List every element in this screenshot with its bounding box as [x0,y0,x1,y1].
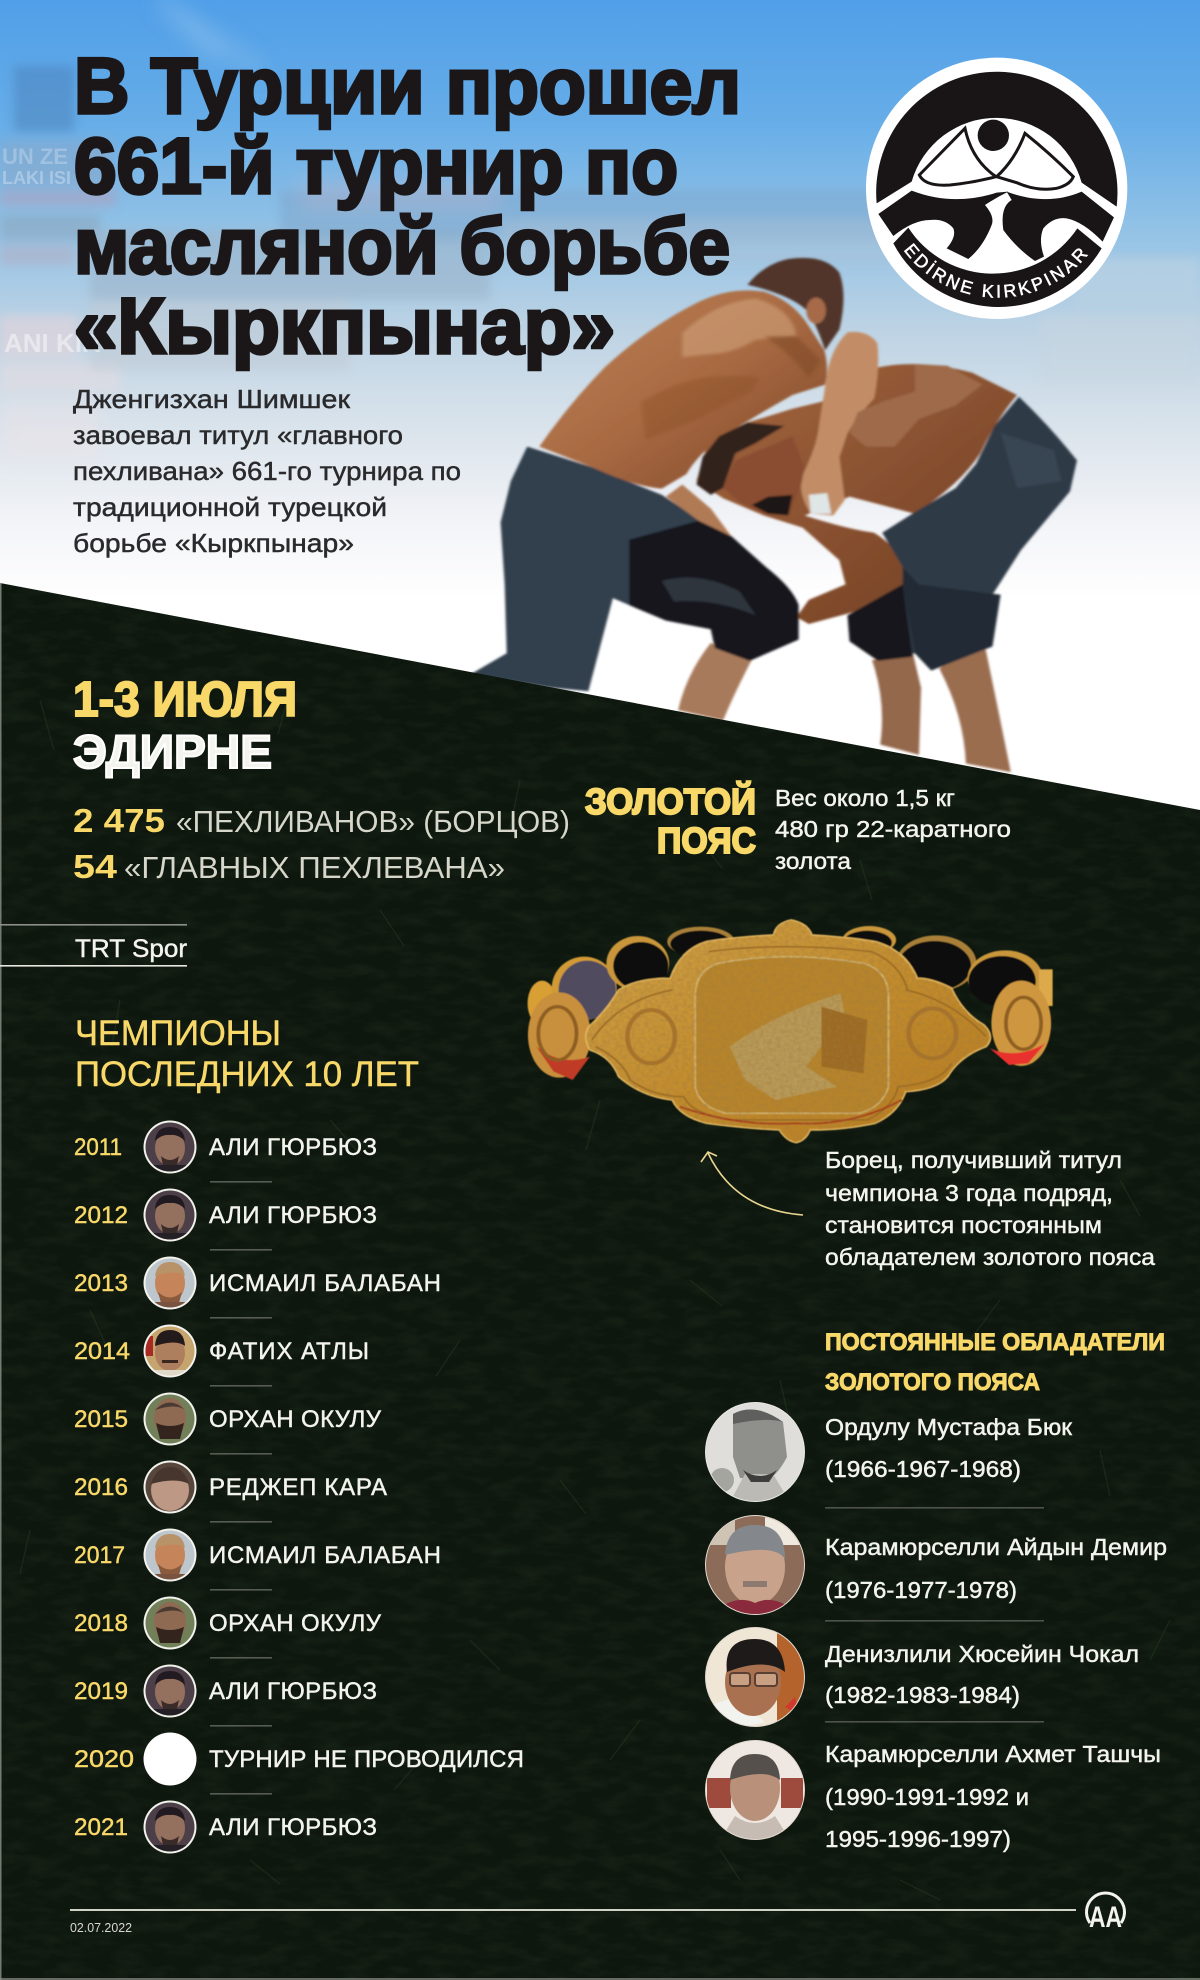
row 2016 [74,1460,387,1514]
holder 1: (1966-1967-1968) [825,1456,1021,1482]
text: belt facts: 480 гр 22-каратного [775,816,1011,842]
row 2016: 2016 [74,1474,128,1501]
heading: champions: ПОСЛЕДНИХ 10 ЛЕТ [75,1055,419,1094]
heading: permanent belt holders: ПОСТОЯННЫЕ ОБЛАДАТЕЛИ [825,1329,1165,1356]
holder 4: (1990-1991-1992 и [825,1784,1029,1810]
row 2014: 2014 [74,1338,130,1365]
row 2014: ФАТИХ АТЛЫ [209,1338,369,1365]
row 2011 [74,1120,377,1174]
row 2020: 2020 [74,1746,134,1773]
row 2017: ИСМАИЛ БАЛАБАН [209,1542,441,1569]
title: масляной борьбе [74,201,730,290]
holder 2: Карамюрселли Айдын Демир [825,1534,1167,1560]
row 2018: ОРХАН ОКУЛУ [209,1610,382,1637]
callout: belt rule: становится постоянным [825,1212,1102,1238]
row 2015: 2015 [74,1406,128,1433]
row 2011: 2011 [74,1134,122,1161]
heading: golden belt [585,780,756,861]
holder 3: Денизлили Хюсейин Чокал [825,1641,1139,1667]
text: belt facts: золота [775,848,851,874]
row 2018: 2018 [74,1610,128,1637]
row 2011: АЛИ ГЮРБЮЗ [209,1134,377,1161]
wrestlers count stats: «ГЛАВНЫХ ПЕХЛЕВАНА» [124,850,505,885]
background: sky and stadium photo: UN ZE [2,144,68,169]
subtitle: пехливана» 661-го турнира по [73,456,461,486]
footer line and date: 02.07.2022 [70,1920,132,1935]
heading: permanent belt holders: ЗОЛОТОГО ПОЯСА [825,1369,1040,1396]
holder 3 [705,1627,1139,1727]
row 2021: АЛИ ГЮРБЮЗ [209,1814,377,1841]
holder 3: (1982-1983-1984) [825,1682,1020,1708]
logo: Edirne Kirkpinar: EDİRNE KIRKPINAR [904,243,1088,298]
callout: belt rule: чемпиона 3 года подряд, [825,1180,1113,1206]
background: sky and stadium photo [0,0,1200,600]
title: 661-й турнир по [74,121,678,210]
wrestlers count stats: «ПЕХЛИВАНОВ» (БОРЦОВ) [176,804,570,839]
title: «Кыркпынар» [74,281,615,370]
subtitle: борьбе «Кыркпынар» [73,528,354,558]
holder 1: Ордулу Мустафа Бюк [825,1414,1073,1440]
heading: permanent belt holders [825,1329,1165,1396]
holder 4: 1995-1996-1997) [825,1826,1011,1852]
panel: dark grass background [0,580,1200,1980]
row 2012: 2012 [74,1202,128,1229]
row 2019: АЛИ ГЮРБЮЗ [209,1678,377,1705]
arrow to belt [701,1152,803,1215]
holder 2 [705,1515,1167,1615]
list: permanent belt holders [705,1402,1167,1852]
heading: golden belt: ЗОЛОТОЙ [585,780,756,822]
callout: belt rule: Борец, получивший титул [825,1147,1122,1173]
wrestlers count stats: 54 [73,848,118,885]
row 2014 [74,1324,369,1378]
subtitle: Дженгизхан Шимшек [73,384,351,414]
subtitle: завоевал титул «главного [73,420,403,450]
list: champions of the last 10 years [74,1120,524,1854]
heading: golden belt: ПОЯС [657,820,756,861]
row 2020: ТУРНИР НЕ ПРОВОДИЛСЯ [209,1746,524,1773]
wrestlers count stats: 2 475 [73,802,165,839]
row 2019: 2019 [74,1678,128,1705]
date and city block [73,673,297,778]
callout: belt rule: обладателем золотого пояса [825,1244,1155,1270]
heading: champions [75,1014,419,1094]
row 2017 [74,1528,441,1582]
row 2017: 2017 [74,1542,125,1569]
holder 4 [705,1740,1161,1852]
subtitle [73,384,461,558]
row 2012 [74,1188,377,1242]
background: sky and stadium photo: LAKI ISI [2,168,71,188]
row 2012: АЛИ ГЮРБЮЗ [209,1202,377,1229]
row 2021 [74,1800,377,1854]
title: В Турции прошел [74,41,741,130]
text: belt facts [775,785,1011,874]
holder 2: (1976-1977-1978) [825,1577,1017,1603]
row 2013: ИСМАИЛ БАЛАБАН [209,1270,441,1297]
subtitle: традиционной турецкой [73,492,387,522]
wrestlers count stats [73,802,570,885]
belt illustration [528,917,1053,1150]
icon: AA agency logo: AA [1089,1901,1122,1934]
background: sky and stadium photo: ANI KIR [4,328,101,358]
heading: champions: ЧЕМПИОНЫ [75,1014,281,1053]
row 2016: РЕДЖЕП КАРА [209,1474,387,1501]
title [74,41,741,370]
row 2015 [74,1392,382,1446]
row 2020 [74,1732,524,1786]
logo: Edirne Kirkpinar [866,58,1128,319]
row 2013: 2013 [74,1270,128,1297]
row 2021: 2021 [74,1814,128,1841]
date and city block: 1-3 ИЮЛЯ [73,673,297,727]
row 2013 [74,1256,441,1310]
holder 4: Карамюрселли Ахмет Ташчы [825,1741,1161,1767]
source: TRT Spor: TRT Spor [75,935,187,963]
text: belt facts: Вес около 1,5 кг [775,785,955,811]
row 2015: ОРХАН ОКУЛУ [209,1406,382,1433]
callout: belt rule [825,1147,1155,1270]
separators [210,1181,272,1795]
separators [825,1507,1044,1723]
icon: AA agency logo [1086,1893,1124,1934]
date and city block: ЭДИРНЕ [73,725,272,778]
holder 1 [705,1402,1073,1502]
row 2019 [74,1664,377,1718]
photo: two oil wrestlers [470,258,1077,772]
row 2018 [74,1596,382,1650]
